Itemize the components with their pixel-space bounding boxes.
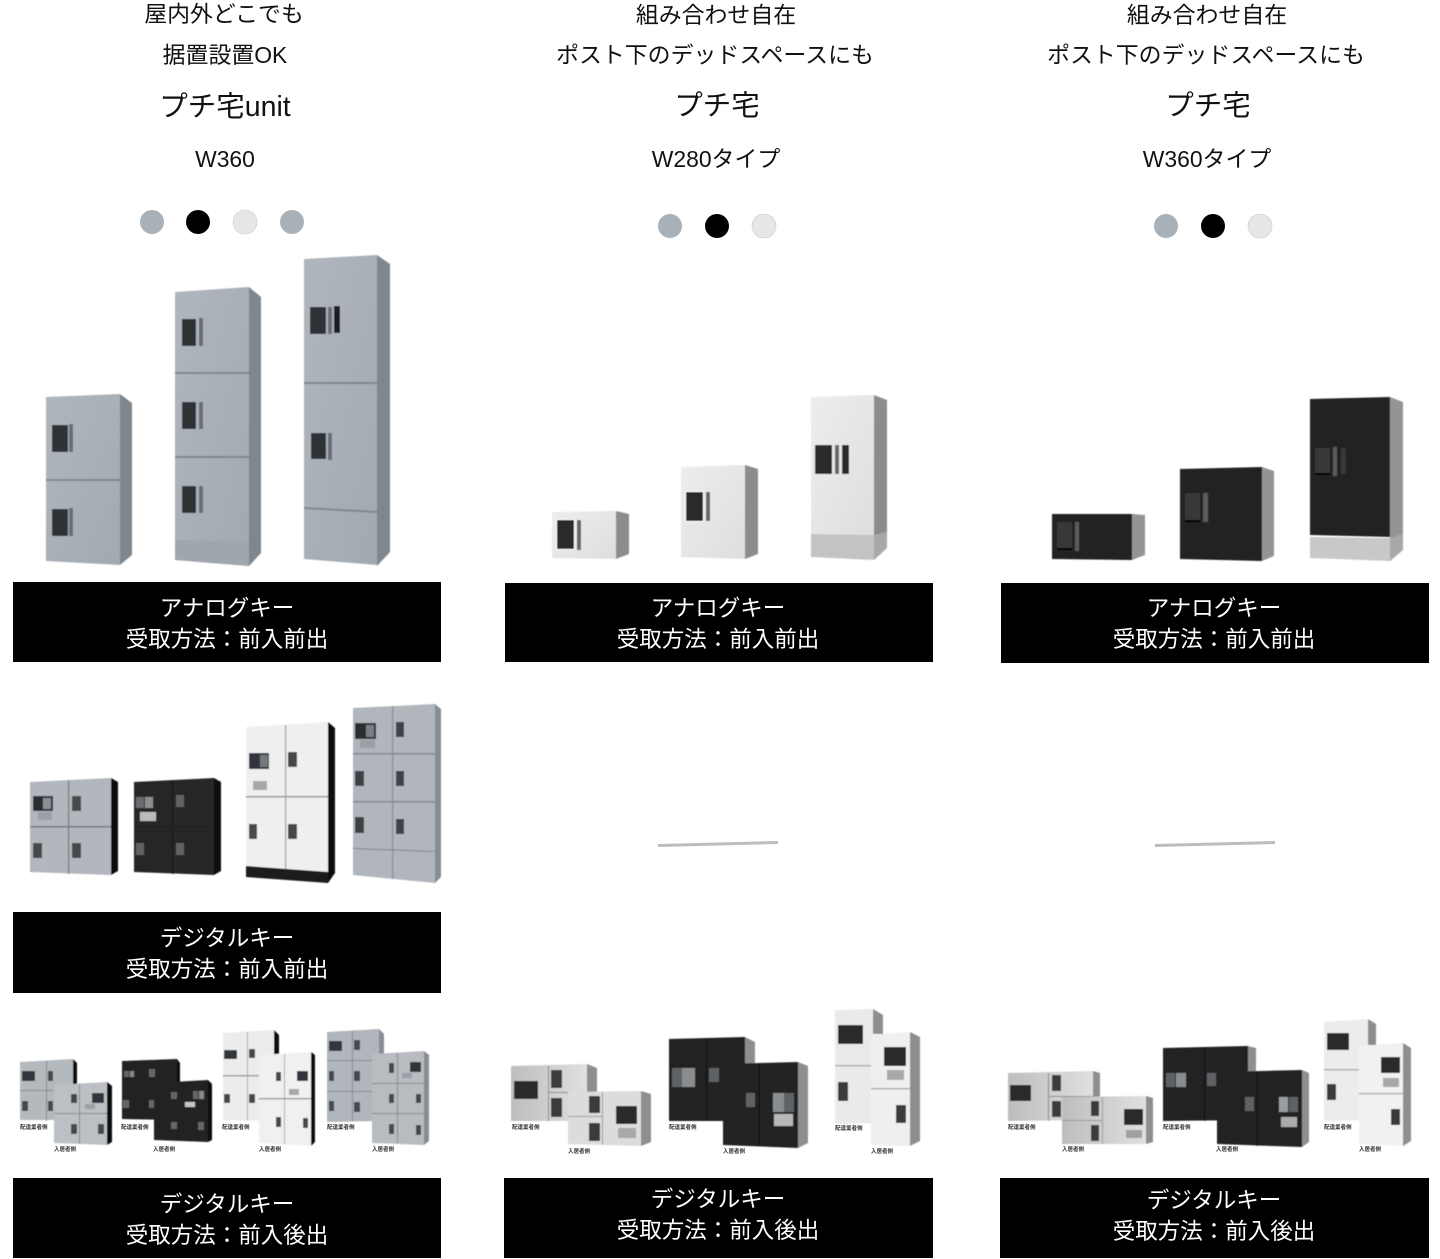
label bar: analog key (13, 582, 441, 662)
product image: analog key lockers black (1052, 397, 1403, 561)
small captions: delivery and resident sides: 入居者側 (259, 1145, 282, 1153)
heading: column 1: 据置設置OK (163, 42, 288, 68)
heading: column 3: W360タイプ (1143, 146, 1271, 172)
panel: column 3 プチ宅 W360タイプ (1000, 2, 1429, 1258)
label bar: digital key through delivery: デジタルキー (651, 1187, 785, 1212)
label bar: analog key: 受取方法：前入前出 (1113, 627, 1315, 652)
small captions: delivery and resident sides: 配達業者側 (327, 1123, 355, 1131)
colour swatches: column 1 (140, 210, 304, 234)
heading: column 2: 組み合わせ自在 (636, 2, 796, 28)
heading: column 3: 組み合わせ自在 (1127, 2, 1287, 28)
small captions: delivery and resident sides (512, 1123, 894, 1155)
heading: column 2: ポスト下のデッドスペースにも (556, 42, 874, 68)
small captions: delivery and resident sides: 配達業者側 (1163, 1123, 1191, 1131)
product image: digital key through-type lockers (511, 1009, 920, 1148)
label bar: digital key through delivery (1000, 1178, 1429, 1258)
small captions: delivery and resident sides: 配達業者側 (121, 1123, 149, 1131)
heading: column 2 (556, 2, 874, 172)
label bar: digital key front delivery (13, 912, 441, 993)
small captions: delivery and resident sides: 入居者側 (568, 1147, 591, 1155)
small captions: delivery and resident sides (1008, 1123, 1382, 1153)
label bar: digital key through delivery (13, 1178, 441, 1258)
heading: column 1: W360 (195, 146, 255, 172)
label bar: analog key: アナログキー (1147, 596, 1281, 621)
colour swatches: column 3 (1154, 214, 1272, 238)
small captions: delivery and resident sides: 配達業者側 (835, 1124, 863, 1132)
heading: column 3: プチ宅 (1165, 90, 1251, 122)
panel: column 2 プチ宅 W280タイプ (504, 2, 933, 1258)
product image: analog key lockers grey (46, 255, 390, 566)
heading: column 1 (144, 1, 304, 172)
label bar: analog key: アナログキー (651, 596, 785, 621)
label bar: digital key through delivery: 受取方法：前入後出 (126, 1223, 328, 1248)
heading: column 2: W280タイプ (652, 146, 780, 172)
small captions: delivery and resident sides: 入居者側 (1062, 1145, 1085, 1153)
small captions: delivery and resident sides: 入居者側 (723, 1147, 746, 1155)
dash: not available (1155, 841, 1275, 847)
small captions: delivery and resident sides: 入居者側 (871, 1147, 894, 1155)
heading: column 2: プチ宅 (674, 90, 760, 122)
product image: digital key through-type lockers (20, 1029, 429, 1146)
label bar: analog key: 受取方法：前入前出 (617, 627, 819, 652)
label bar: analog key (505, 583, 933, 662)
small captions: delivery and resident sides: 配達業者側 (1008, 1123, 1036, 1131)
label bar: analog key: 受取方法：前入前出 (126, 627, 328, 652)
small captions: delivery and resident sides: 配達業者側 (512, 1123, 540, 1131)
heading: column 3 (1047, 2, 1365, 172)
label bar: digital key through delivery (504, 1178, 933, 1258)
small captions: delivery and resident sides: 配達業者側 (222, 1123, 250, 1131)
label bar: digital key through delivery: デジタルキー (160, 1192, 294, 1217)
panel: column 1 プチ宅unit W360 (13, 1, 441, 1258)
small captions: delivery and resident sides: 入居者側 (1359, 1145, 1382, 1153)
small captions: delivery and resident sides: 入居者側 (153, 1145, 176, 1153)
small captions: delivery and resident sides: 入居者側 (372, 1145, 395, 1153)
heading: column 1: 屋内外どこでも (144, 1, 304, 27)
small captions: delivery and resident sides: 配達業者側 (669, 1123, 697, 1131)
label bar: digital key front delivery: デジタルキー (160, 926, 294, 951)
small captions: delivery and resident sides: 配達業者側 (1324, 1123, 1352, 1131)
small captions: delivery and resident sides: 入居者側 (54, 1145, 77, 1153)
colour swatches: column 2 (658, 214, 776, 238)
label bar: analog key (1001, 583, 1429, 663)
small captions: delivery and resident sides (20, 1123, 395, 1153)
label bar: digital key through delivery: デジタルキー (1147, 1188, 1281, 1213)
product image: digital key front-entry lockers (30, 704, 441, 883)
label bar: digital key through delivery: 受取方法：前入後出 (617, 1218, 819, 1243)
label bar: digital key front delivery: 受取方法：前入前出 (126, 957, 328, 982)
dash: not available (658, 841, 778, 847)
product image: digital key through-type lockers (1008, 1019, 1411, 1147)
small captions: delivery and resident sides: 配達業者側 (20, 1123, 48, 1131)
label bar: analog key: アナログキー (160, 596, 294, 621)
heading: column 1: プチ宅unit (159, 91, 291, 123)
small captions: delivery and resident sides: 入居者側 (1216, 1145, 1239, 1153)
label bar: digital key through delivery: 受取方法：前入後出 (1113, 1219, 1315, 1244)
product image: analog key lockers white (552, 395, 887, 560)
heading: column 3: ポスト下のデッドスペースにも (1047, 42, 1365, 68)
